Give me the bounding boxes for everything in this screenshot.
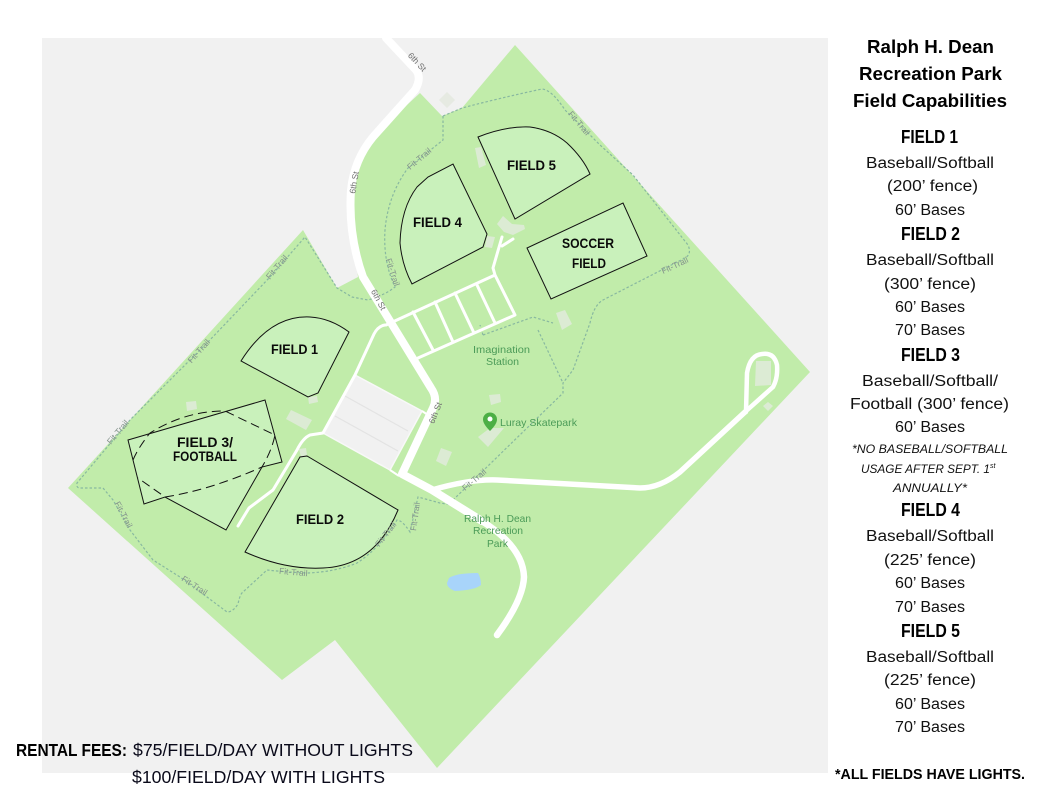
field 4 details: FIELD 4 (901, 500, 960, 520)
fit trail labels: Fit-Trail (264, 253, 290, 281)
place labels: Recreation (473, 525, 523, 537)
field 3 football outline (128, 400, 282, 530)
field 5 details: 60’ Bases (895, 696, 965, 713)
rental fees: RENTAL FEES: (16, 740, 127, 760)
field 3 details: ANNUALLY* (892, 481, 967, 495)
field 2 details: 70’ Bases (895, 322, 965, 339)
fit trail labels: Fit-Trail (566, 109, 592, 137)
pond (447, 573, 481, 591)
courts (323, 375, 431, 476)
road: 6th St (350, 38, 482, 521)
place labels: Ralph H. Dean (464, 513, 531, 525)
field 5 details (866, 621, 994, 736)
field 5 details: 70’ Bases (895, 719, 965, 736)
field 1 outline (241, 317, 349, 397)
path: west walkway (238, 325, 385, 526)
field 2 outline (245, 456, 398, 568)
map background (42, 38, 828, 773)
field labels: FIELD (572, 255, 606, 271)
field 5 details: Baseball/Softball (866, 649, 994, 666)
field 3 details: 60’ Bases (895, 419, 965, 436)
field 1 details: 60’ Bases (895, 202, 965, 219)
fit trail labels: Fit-Trail (113, 500, 135, 530)
place labels: Luray Skatepark (500, 417, 578, 429)
park grounds (68, 45, 810, 768)
field 4 details: (225’ fence) (884, 552, 976, 569)
heading (853, 37, 1007, 111)
field 1 details (866, 127, 994, 219)
playing fields (128, 127, 647, 568)
field labels: FIELD 4 (413, 214, 462, 230)
field 3 details: USAGE AFTER SEPT. 1 (861, 462, 990, 476)
fit trail labels: Fit-Trail (186, 337, 212, 365)
fit trail labels: Fit-Trail (384, 257, 402, 287)
street labels (347, 50, 444, 425)
soccer field outline (527, 203, 647, 299)
fit trail (77, 89, 689, 612)
fit trail labels: Fit-Trail (408, 502, 422, 531)
street labels: 6th St (347, 170, 361, 194)
street labels: 6th St (406, 50, 429, 74)
road: skatepark drive (432, 412, 745, 490)
field 4 outline (400, 164, 487, 284)
field 3 details: FIELD 3 (901, 345, 960, 365)
panel: field capabilities (850, 37, 1009, 736)
road: 6th St south end (480, 520, 524, 635)
fit trail labels: Fit-Trail (279, 566, 308, 578)
field 5 details: FIELD 5 (901, 621, 960, 641)
fit trail labels: Fit-Trail (460, 467, 488, 493)
field 1 details: (200’ fence) (887, 178, 978, 195)
field 3 details (850, 345, 1009, 495)
field labels: FIELD 1 (271, 341, 318, 357)
panel: park map (42, 38, 828, 773)
field labels (173, 157, 614, 527)
field 4 details: 70’ Bases (895, 599, 965, 616)
buildings (186, 92, 773, 466)
place labels: Park (487, 538, 509, 550)
field 3 details: Football (300’ fence) (850, 396, 1009, 413)
field 2 details (866, 224, 994, 339)
heading: Ralph H. Dean (867, 37, 994, 57)
field 5 outline (478, 127, 590, 219)
field 2 details: 60’ Bases (895, 299, 965, 316)
rental fees (16, 740, 413, 787)
icon: map pin (483, 412, 497, 431)
street labels: 6th St (369, 287, 389, 312)
heading: Recreation Park (859, 64, 1003, 84)
heading: Field Capabilities (853, 91, 1007, 111)
place labels: Imagination (473, 344, 530, 356)
fit trail labels: Fit-Trail (105, 418, 131, 446)
fit trail labels: Fit-Trail (180, 574, 209, 597)
field 3 details: *NO BASEBALL/SOFTBALL (852, 442, 1008, 456)
field 2 details: FIELD 2 (901, 224, 960, 244)
roads (238, 38, 777, 635)
field 1 details: Baseball/Softball (866, 155, 994, 172)
field 2 details: (300’ fence) (884, 276, 976, 293)
fit trail labels (105, 109, 690, 597)
field labels: FOOTBALL (173, 448, 237, 464)
rental fees: $100/FIELD/DAY WITH LIGHTS (132, 767, 385, 787)
place labels (464, 344, 578, 550)
place labels: Station (486, 356, 519, 368)
field labels: SOCCER (562, 235, 614, 251)
field 1 details: FIELD 1 (901, 127, 958, 147)
field 3 details: Baseball/Softball/ (862, 373, 999, 390)
fit trail labels: Fit-Trail (373, 520, 398, 548)
rental fees: $75/FIELD/DAY WITHOUT LIGHTS (133, 740, 413, 760)
field labels: FIELD 5 (507, 157, 556, 173)
field 2 details: Baseball/Softball (866, 252, 994, 269)
lights note: *ALL FIELDS HAVE LIGHTS. (835, 766, 1025, 783)
field labels: FIELD 2 (296, 511, 344, 527)
field 4 details (866, 500, 994, 616)
field 3 baseball dashed overlay (133, 411, 275, 497)
parking lot (386, 237, 515, 358)
field 3 details: st (990, 463, 996, 470)
fit trail labels: Fit-Trail (660, 255, 690, 276)
field 4 details: Baseball/Softball (866, 528, 994, 545)
road: skatepark loop (745, 354, 777, 412)
field 5 details: (225’ fence) (884, 672, 976, 689)
field 4 details: 60’ Bases (895, 575, 965, 592)
field labels: FIELD 3/ (177, 434, 233, 450)
street labels: 6th St (426, 400, 444, 425)
fit trail labels: Fit-Trail (405, 146, 433, 172)
